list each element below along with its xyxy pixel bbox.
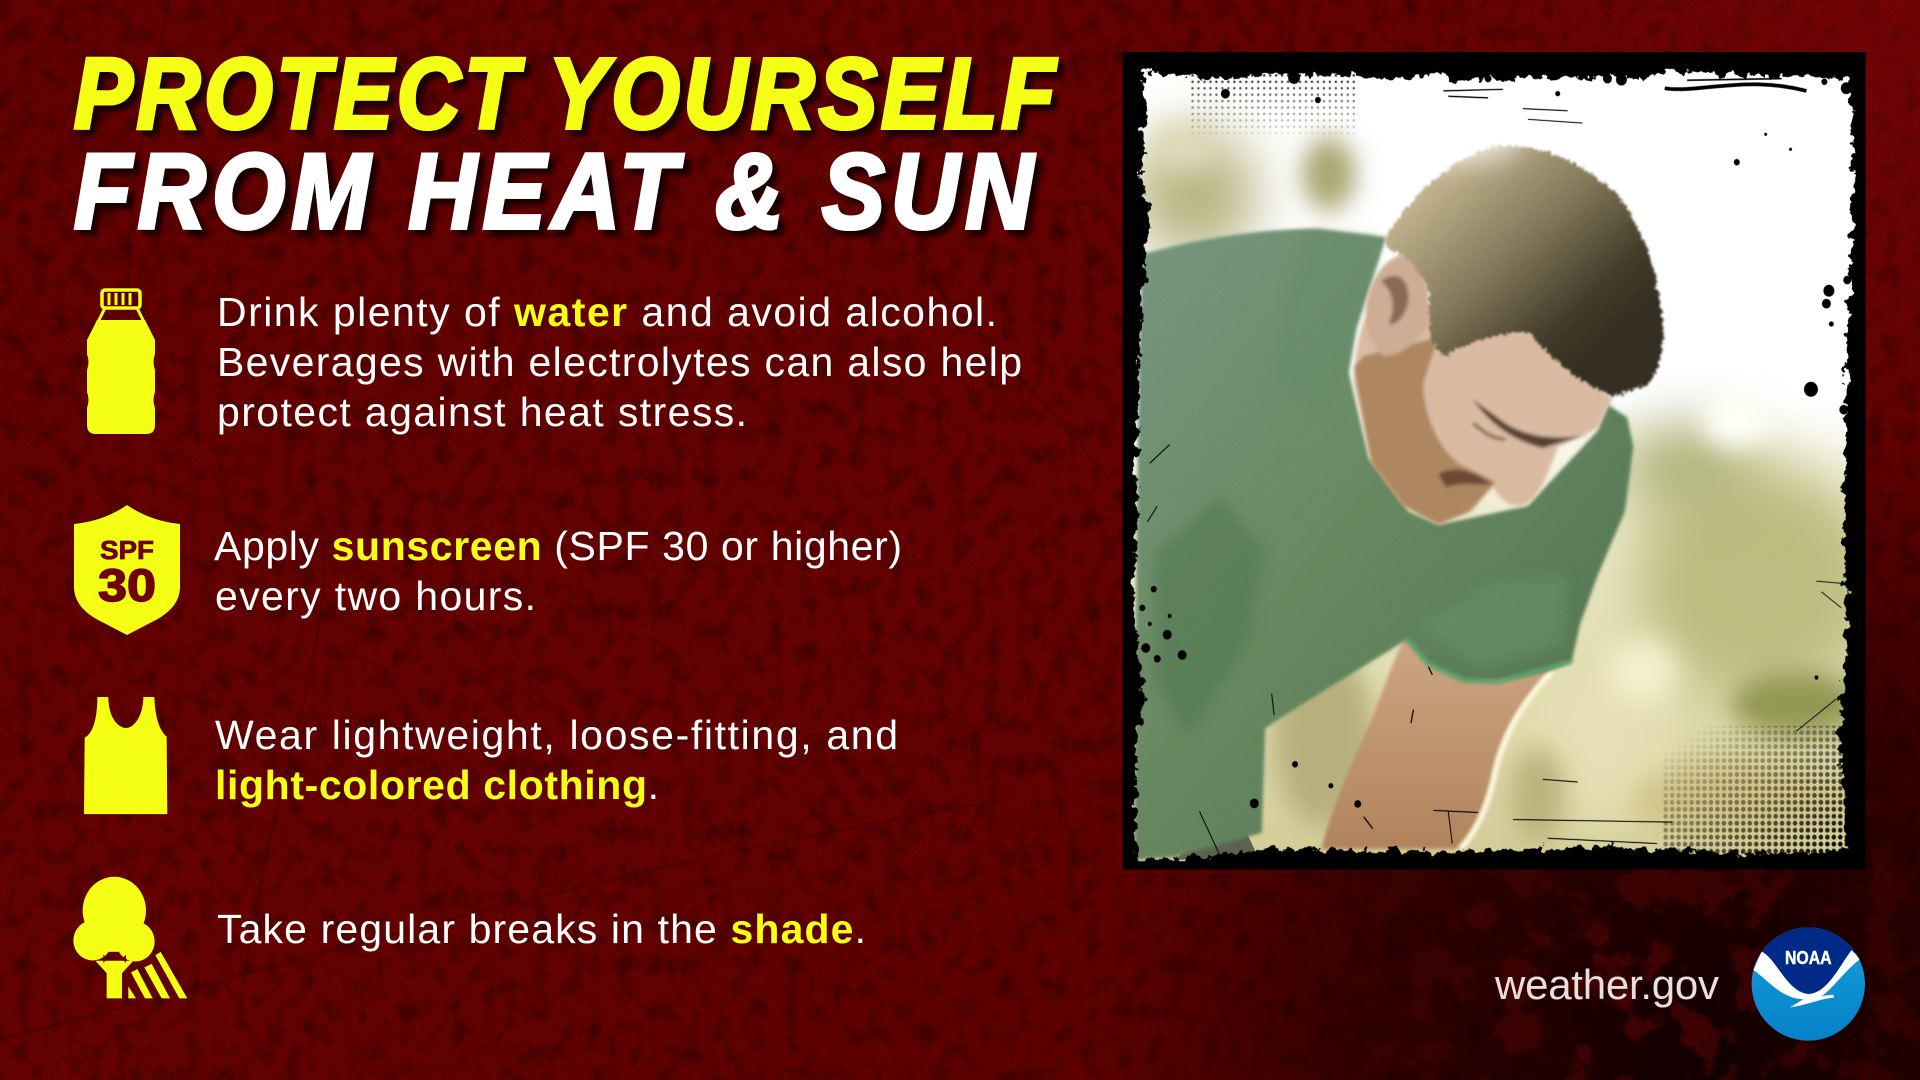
text: clothing tip: light-colored clothing. <box>215 762 659 808</box>
icon: water bottle <box>87 290 155 434</box>
logo: dark blue upper field <box>1747 920 1870 994</box>
photo: sleeve hem <box>1406 637 1572 682</box>
photo: forearm <box>1321 635 1553 849</box>
tip: sunscreen <box>74 505 902 635</box>
icon: SPF 30 shield: 30 <box>98 560 156 611</box>
photo: face and head <box>1354 254 1612 525</box>
tip: clothing <box>84 697 898 814</box>
photo: lower torso shadow <box>1176 834 1256 860</box>
text: water tip <box>217 289 1022 435</box>
text: water tip: Drink plenty of water and avoid alcohol. <box>217 289 997 335</box>
icon: tree with shade <box>73 877 187 998</box>
logo: NOAA <box>1747 920 1870 1041</box>
title line 1: PROTECT YOURSELF <box>74 38 1057 149</box>
photo: scratch marks <box>1147 79 1846 854</box>
photo: shirt film grain <box>1130 222 1637 865</box>
logo: NOAA wordmark: NOAA <box>1785 947 1832 968</box>
text: water tip: Beverages with electrolytes can also help <box>217 339 1022 385</box>
logo: white gull swoosh <box>1753 950 1860 1007</box>
title <box>74 38 1057 251</box>
photo panel: man in green shirt with grunge frame <box>1122 52 1866 870</box>
photo: halftone bottom-right <box>1662 726 1851 854</box>
text: sunscreen tip: Apply sunscreen (SPF 30 or higher) <box>214 523 902 569</box>
tip: shade <box>73 877 866 998</box>
text: sunscreen tip <box>214 523 902 619</box>
title line 2: FROM HEAT & SUN <box>74 132 1035 251</box>
photo: face <box>1352 306 1614 508</box>
photo: sun haze <box>1374 120 1523 163</box>
photo: halftone top-left <box>1190 72 1359 142</box>
photo: eyelid <box>1473 423 1505 439</box>
website label: weather.gov <box>1494 961 1719 1008</box>
text: water tip: protect against heat stress. <box>217 389 747 435</box>
photo: eye and brow <box>1472 399 1590 448</box>
photo: green shirt <box>1135 229 1633 860</box>
text: sunscreen tip: every two hours. <box>215 573 536 619</box>
photo: rough black frame <box>1090 19 1896 902</box>
icon: tank top <box>84 697 167 814</box>
photo: frame edge <box>1122 52 1865 869</box>
photo: hair <box>1385 146 1663 396</box>
photo: arm rim light <box>1461 671 1553 849</box>
photo: sunlit backdrop <box>1130 67 1876 865</box>
text: clothing tip: Wear lightweight, loose-fitting, and <box>215 712 898 758</box>
icon: SPF 30 shield: SPF <box>100 535 154 565</box>
photo: shirt shading <box>1155 233 1568 736</box>
photo: ink splatter <box>1139 69 1852 808</box>
photo: mouth <box>1438 469 1493 487</box>
icon: SPF 30 shield <box>74 505 180 635</box>
text: clothing tip <box>215 712 898 808</box>
text: shade tip: Take regular breaks in the shade. <box>217 906 866 952</box>
panel: tips <box>73 289 1022 998</box>
tip: water <box>87 289 1022 435</box>
photo: beard <box>1354 337 1496 525</box>
photo: ear inner <box>1381 276 1408 324</box>
photo: ear <box>1366 254 1429 356</box>
